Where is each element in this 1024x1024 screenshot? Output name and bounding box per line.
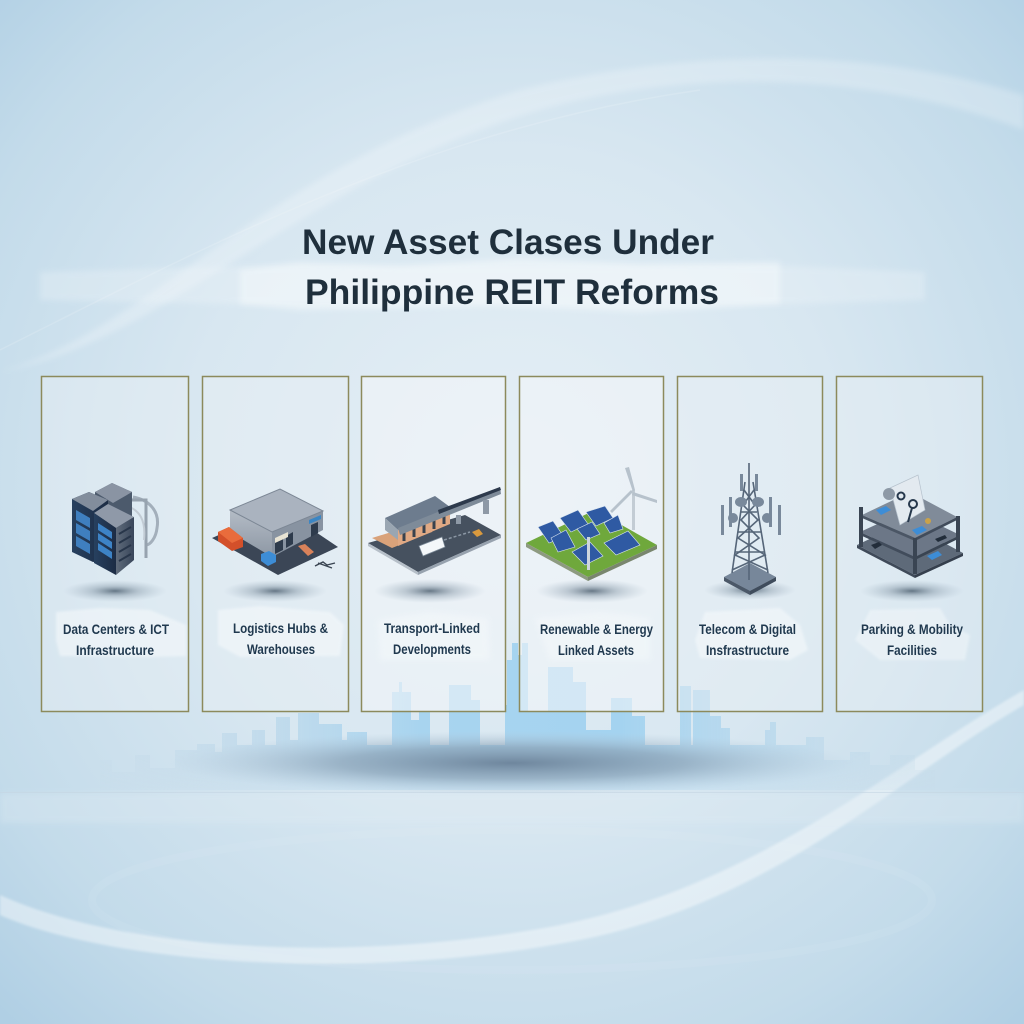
card: Logistics Hubs & Warehouses [202,376,348,712]
label: Data Centers & ICT [63,622,170,637]
label: Logistics Hubs & [233,621,328,636]
label [540,622,653,658]
label smudge [695,608,808,660]
icon: warehouse [212,489,338,602]
label: Transport-Linked [384,621,480,636]
title: New Asset Clases Under [302,223,714,262]
label smudge [855,608,970,660]
label smudge [56,608,186,657]
icon: solar farm and wind turbine [526,467,657,603]
label: Warehouses [247,642,315,657]
label [63,622,170,658]
label [699,622,796,658]
card: Parking & Mobility Facilities [836,376,982,712]
label: Telecom & Digital [699,622,796,637]
icon: server racks [63,483,167,602]
label smudge [218,606,344,657]
label: Parking & Mobility [861,622,963,637]
label: Insfrastructure [706,643,789,658]
icon: transit station [368,487,501,603]
label [861,622,963,658]
label smudge [535,612,650,660]
title: Philippine REIT Reforms [305,273,719,312]
label: Infrastructure [76,643,154,658]
title [302,223,719,312]
title highlight smudge [40,258,925,312]
label: Linked Assets [558,643,634,658]
label: Renewable & Energy [540,622,653,637]
card: Telecom & Digital Infrastructure [678,376,822,712]
label [384,621,480,657]
label [233,621,328,657]
icon: multilevel parking [857,475,964,602]
label smudge [378,612,490,660]
label: Facilities [887,643,937,658]
card: Transport-Linked Developments [362,376,506,712]
label: Developments [393,642,471,657]
card: Data Centers & ICT Infrastructure [42,376,188,712]
card: Renewable & Energy Linked Assets [520,376,664,712]
city skyline [176,643,914,790]
skyline ground shadow [167,731,857,795]
icon: telecom tower [704,463,796,600]
